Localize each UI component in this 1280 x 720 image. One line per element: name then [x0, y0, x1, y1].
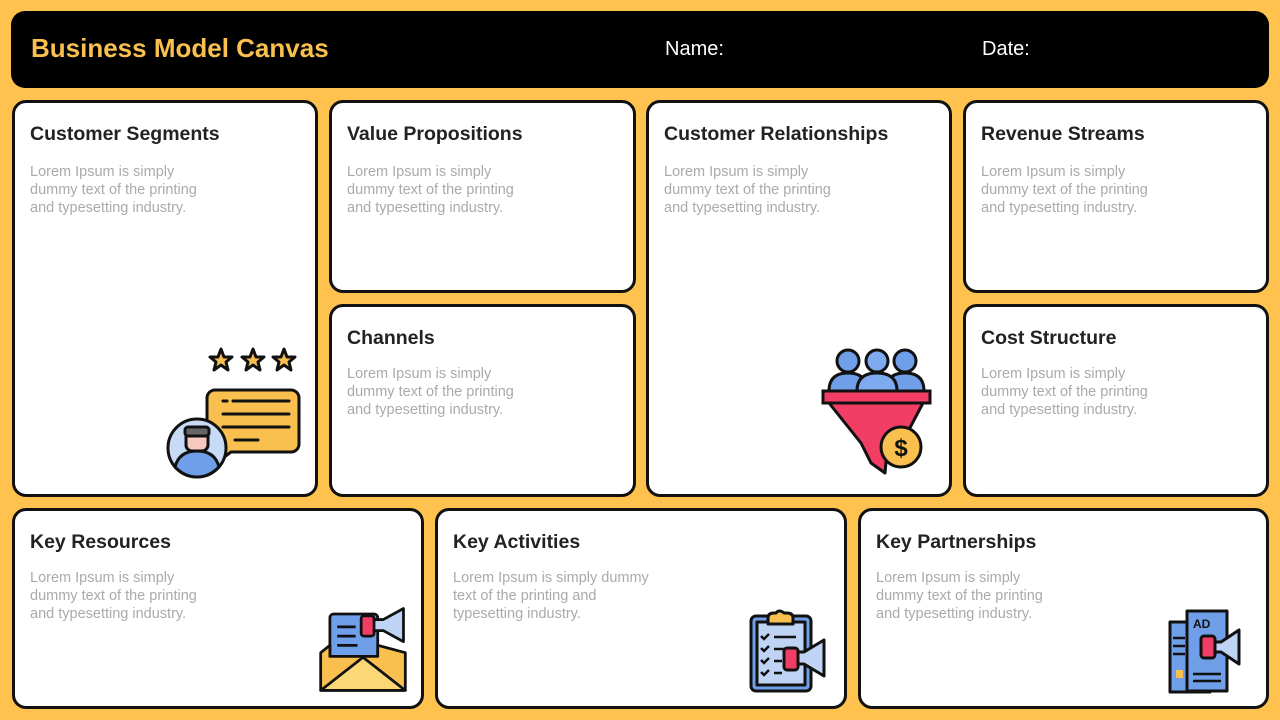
panel: revenue streams — [963, 100, 1269, 293]
panel: customer relationships — [646, 100, 952, 497]
text: Lorem Ipsum is simply dummy text of the printing and typesetting industry. — [30, 164, 197, 216]
panel: customer segments: Customer Segments — [30, 123, 220, 145]
panel: key partnerships: Key Partnerships — [876, 531, 1036, 553]
panel: channels — [329, 304, 636, 497]
panel: key resources — [12, 508, 424, 709]
panel: key resources: Key Resources — [30, 531, 171, 553]
icon: envelope megaphone — [319, 607, 407, 692]
name field: Name: — [665, 38, 724, 60]
panel: key activities — [435, 508, 847, 709]
text: Lorem Ipsum is simply dummy text of the printing and typesetting industry. — [30, 570, 197, 622]
text: Lorem Ipsum is simply dummy text of the printing and typesetting industry. — [981, 164, 1148, 216]
title: Business Model Canvas — [31, 33, 329, 63]
text: Lorem Ipsum is simply dummy text of the printing and typesetting industry. — [981, 366, 1148, 418]
panel: cost structure: Cost Structure — [981, 327, 1116, 349]
panel: channels: Channels — [347, 327, 435, 349]
icon: customer review — [166, 348, 300, 478]
panel: cost structure — [963, 304, 1269, 497]
icon: clipboard megaphone — [750, 610, 826, 692]
panel: key activities: Key Activities — [453, 531, 580, 553]
icon: ad flyer megaphone — [1168, 610, 1240, 694]
panel: key partnerships — [858, 508, 1269, 709]
text: Lorem Ipsum is simply dummy text of the printing and typesetting industry. — [347, 366, 514, 418]
icon: ad flyer megaphone: AD — [1193, 617, 1211, 631]
icon: sales funnel — [822, 348, 932, 474]
text: Lorem Ipsum is simply dummy text of the printing and typesetting industry. — [453, 570, 649, 622]
panel: value propositions — [329, 100, 636, 293]
panel: value propositions: Value Propositions — [347, 123, 523, 145]
date field: Date: — [982, 38, 1030, 60]
panel: customer relationships: Customer Relationships — [664, 123, 888, 145]
text: Lorem Ipsum is simply dummy text of the printing and typesetting industry. — [347, 164, 514, 216]
panel: revenue streams: Revenue Streams — [981, 123, 1145, 145]
text: Lorem Ipsum is simply dummy text of the printing and typesetting industry. — [876, 570, 1043, 622]
text: Lorem Ipsum is simply dummy text of the printing and typesetting industry. — [664, 164, 831, 216]
panel: customer segments — [12, 100, 318, 497]
icon: sales funnel: $ — [894, 435, 908, 462]
header bar — [11, 11, 1269, 88]
